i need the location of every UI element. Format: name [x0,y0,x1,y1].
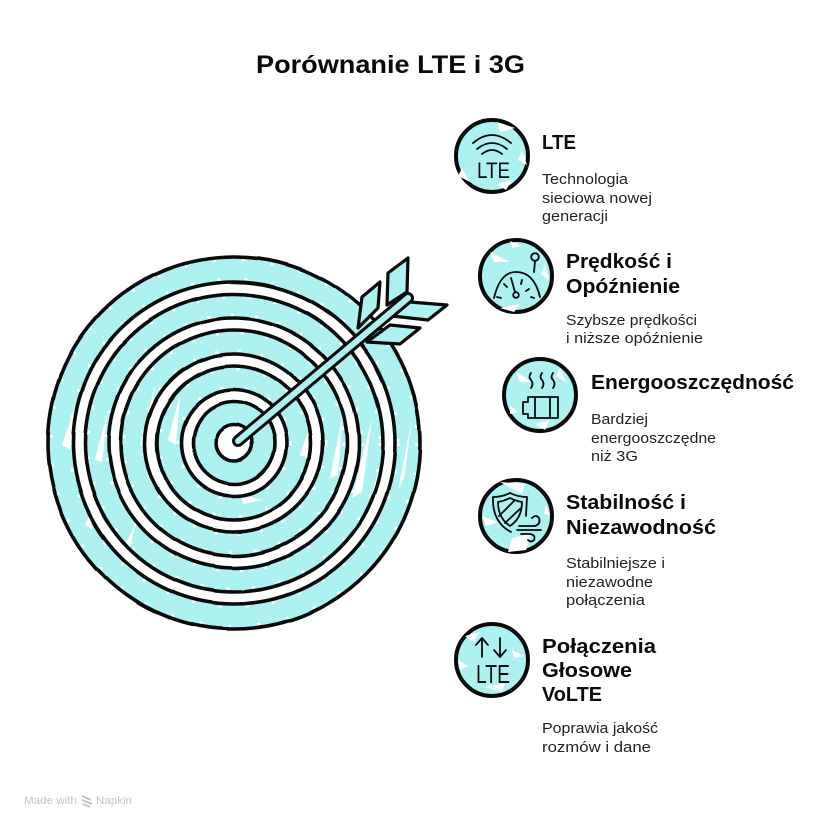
heading: stability and reliability: Stabilność i [566,492,686,514]
title: Porównanie LTE i 3G [256,51,525,79]
description: LTE: generacji [542,209,608,225]
heading: stability and reliability: Niezawodność [566,517,716,539]
footer: Made with Napkin: Napkin [96,795,132,807]
heading: LTE: LTE [542,132,576,154]
description: energy efficiency [591,412,716,465]
footer: Made with Napkin: Made with [24,795,77,807]
heading: energy efficiency: Energooszczędność [591,372,794,394]
icon: LTE wifi [456,120,528,192]
item: VoLTE [456,624,658,756]
heading: speed and latency [566,251,680,298]
item: LTE [456,120,652,225]
description: speed and latency [566,313,703,347]
icon: up-down arrows LTE: LTE [476,659,510,689]
heading: stability and reliability [566,492,716,539]
description: LTE [542,172,652,225]
icon: LTE wifi: LTE [477,158,510,183]
description: stability and reliability [566,556,665,609]
arrow shaft [238,298,408,441]
item: speed and latency [480,240,703,347]
description: energy efficiency: niż 3G [591,449,638,465]
description: VoLTE: rozmów i dane [542,740,651,756]
footer: Made with Napkin [24,795,132,807]
description: LTE: sieciowa nowej [542,191,652,207]
description: energy efficiency: energooszczędne [591,431,716,447]
description: stability and reliability: Stabilniejsze i [566,556,665,572]
arrow in target [238,258,447,441]
heading: VoLTE [542,636,657,706]
heading: VoLTE: Połączenia [542,636,657,658]
description: energy efficiency: Bardziej [591,412,648,428]
heading: speed and latency: Prędkość i [566,251,672,273]
description: speed and latency: Szybsze prędkości [566,313,697,329]
description: VoLTE [542,721,658,756]
white notches along ring edges [51,260,417,626]
target illustration [48,257,420,629]
description: VoLTE: Poprawia jakość [542,721,658,737]
item: stability and reliability [480,480,716,609]
target outlines [48,257,420,629]
heading: VoLTE: VoLTE [542,684,602,706]
icon: battery with heat [504,359,576,431]
heading: speed and latency: Opóźnienie [566,276,680,298]
description: speed and latency: i niższe opóźnienie [566,331,703,347]
description: stability and reliability: niezawodne [566,575,653,591]
target cyan fill rings [48,257,420,629]
white hatching on target [60,320,412,560]
icon: speedometer [480,240,552,312]
icon: up-down arrows LTE [456,624,528,696]
description: LTE: Technologia [542,172,629,188]
item: energy efficiency [504,359,794,465]
description: stability and reliability: połączenia [566,593,646,609]
arrow fletching [358,258,447,344]
heading: VoLTE: Głosowe [542,660,632,682]
icon: shield and wind [480,480,552,552]
